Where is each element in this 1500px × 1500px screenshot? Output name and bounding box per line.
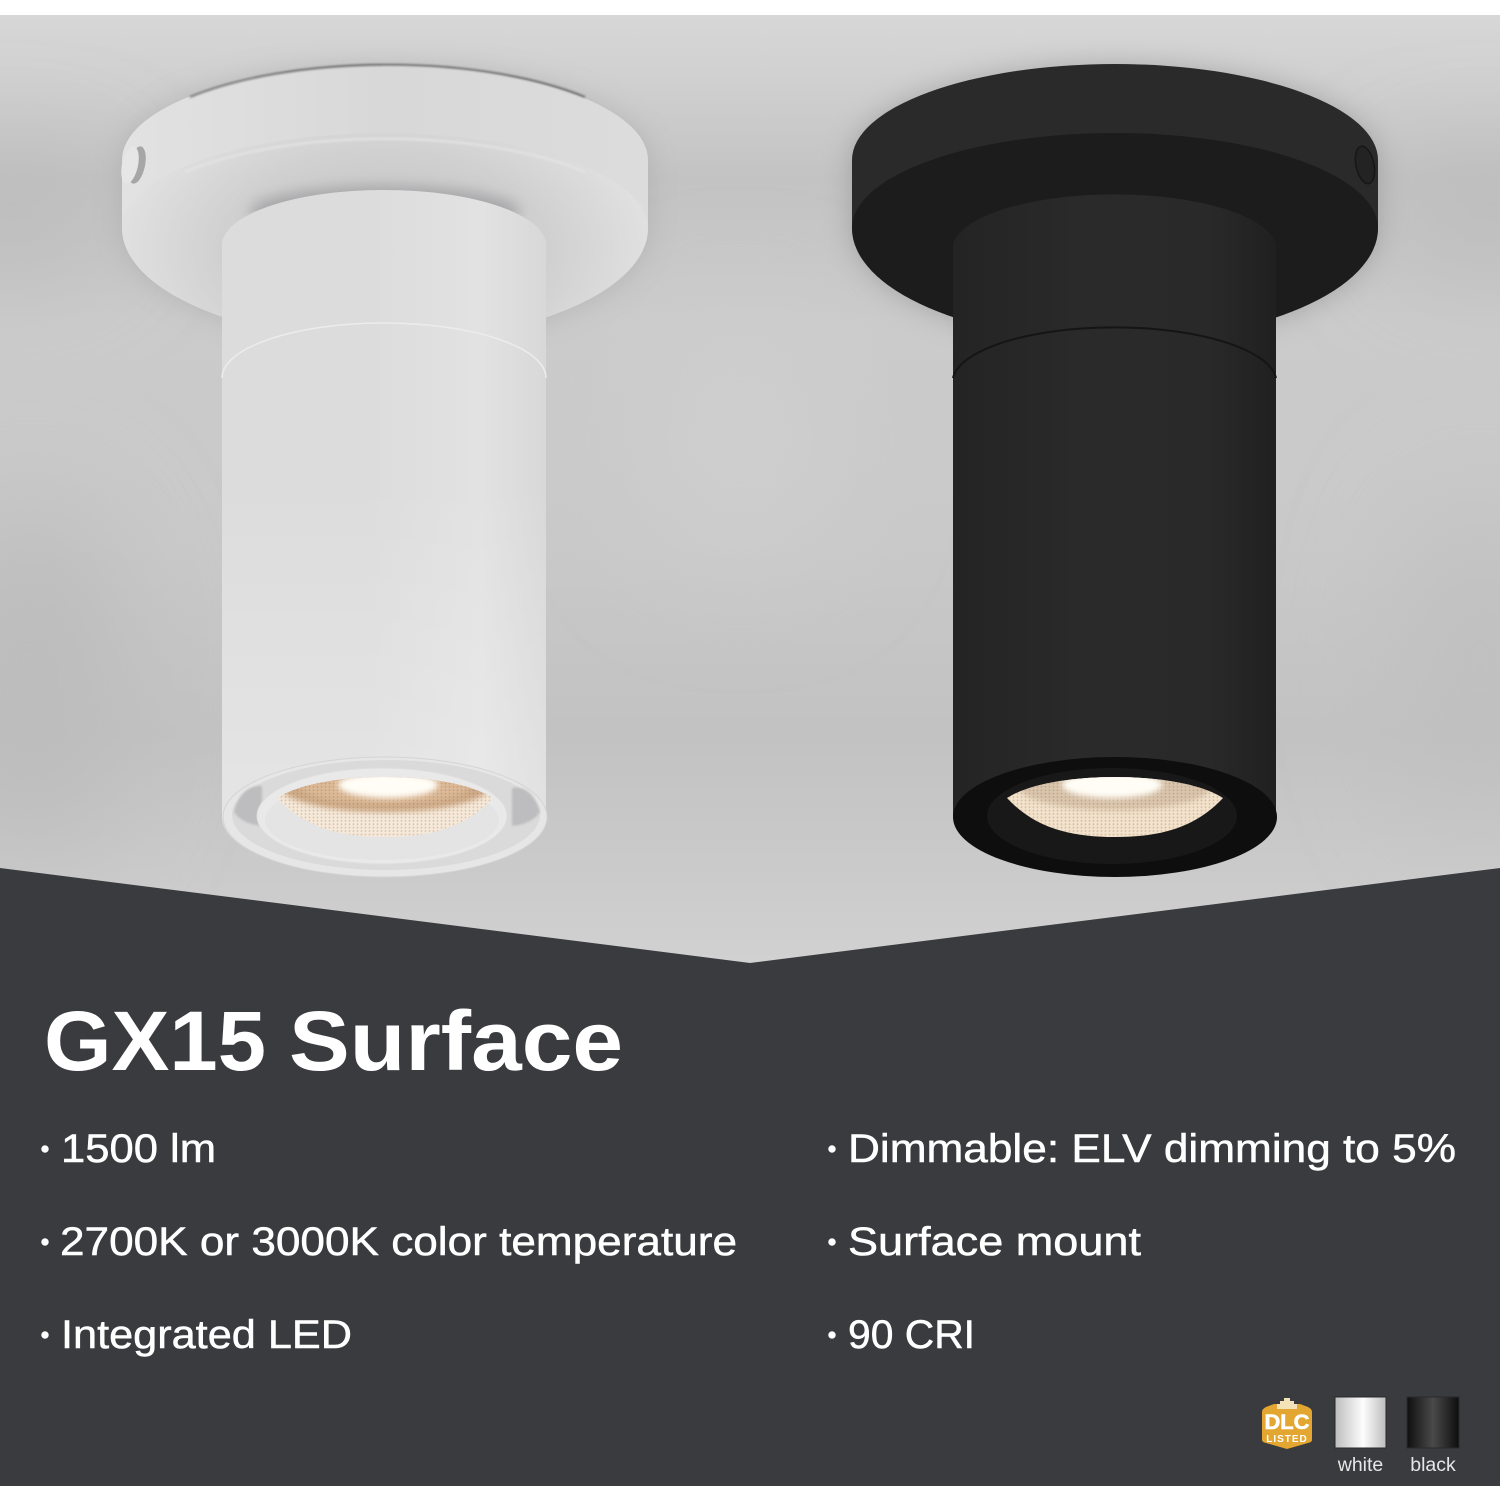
bullet: dimmable: Dimmable: ELV dimming to 5% — [848, 1127, 1456, 1171]
dark info panel — [0, 868, 1500, 1486]
bullet: surface mount: Surface mount — [848, 1220, 1141, 1264]
swatch: black — [1407, 1397, 1459, 1476]
plate lower face top highlight — [185, 139, 585, 172]
lamp: white finish — [118, 65, 648, 877]
badge: DLC listed: DLC — [1264, 1411, 1310, 1434]
cylinder body — [222, 190, 546, 877]
title: GX15 — [44, 994, 266, 1088]
badge: DLC listed: LISTED — [1266, 1434, 1308, 1445]
feature list: right column — [828, 1127, 1456, 1357]
ceiling background — [0, 15, 1500, 975]
cylinder lower highlight — [222, 480, 546, 877]
bullet: 1500 lm: 1500 lm — [61, 1127, 216, 1171]
title — [44, 994, 623, 1088]
plate upper side — [852, 64, 1378, 341]
feature list: left column — [42, 1127, 737, 1357]
cylinder body — [953, 194, 1276, 872]
plate lower face — [122, 133, 648, 341]
swatch: white: white — [1337, 1454, 1383, 1476]
screw — [1352, 145, 1378, 185]
plate upper side — [122, 65, 648, 341]
cylinder seam — [953, 327, 1276, 378]
swatch: white — [1335, 1397, 1386, 1476]
cylinder seam — [222, 323, 546, 378]
plate lower face — [852, 133, 1378, 341]
badge: DLC listed — [1262, 1398, 1312, 1449]
rim and lens — [953, 757, 1277, 877]
swatch: black: black — [1410, 1454, 1456, 1476]
screw — [118, 145, 149, 185]
bullet: color temperature: 2700K or 3000K color temperature — [60, 1220, 737, 1264]
bullet: integrated LED: Integrated LED — [61, 1313, 352, 1357]
bullet: 90 CRI: 90 CRI — [848, 1313, 975, 1357]
lamp: black finish — [852, 64, 1378, 877]
title: Surface — [289, 994, 623, 1088]
shadow above cylinder — [250, 186, 520, 238]
rim and lens — [223, 757, 547, 877]
